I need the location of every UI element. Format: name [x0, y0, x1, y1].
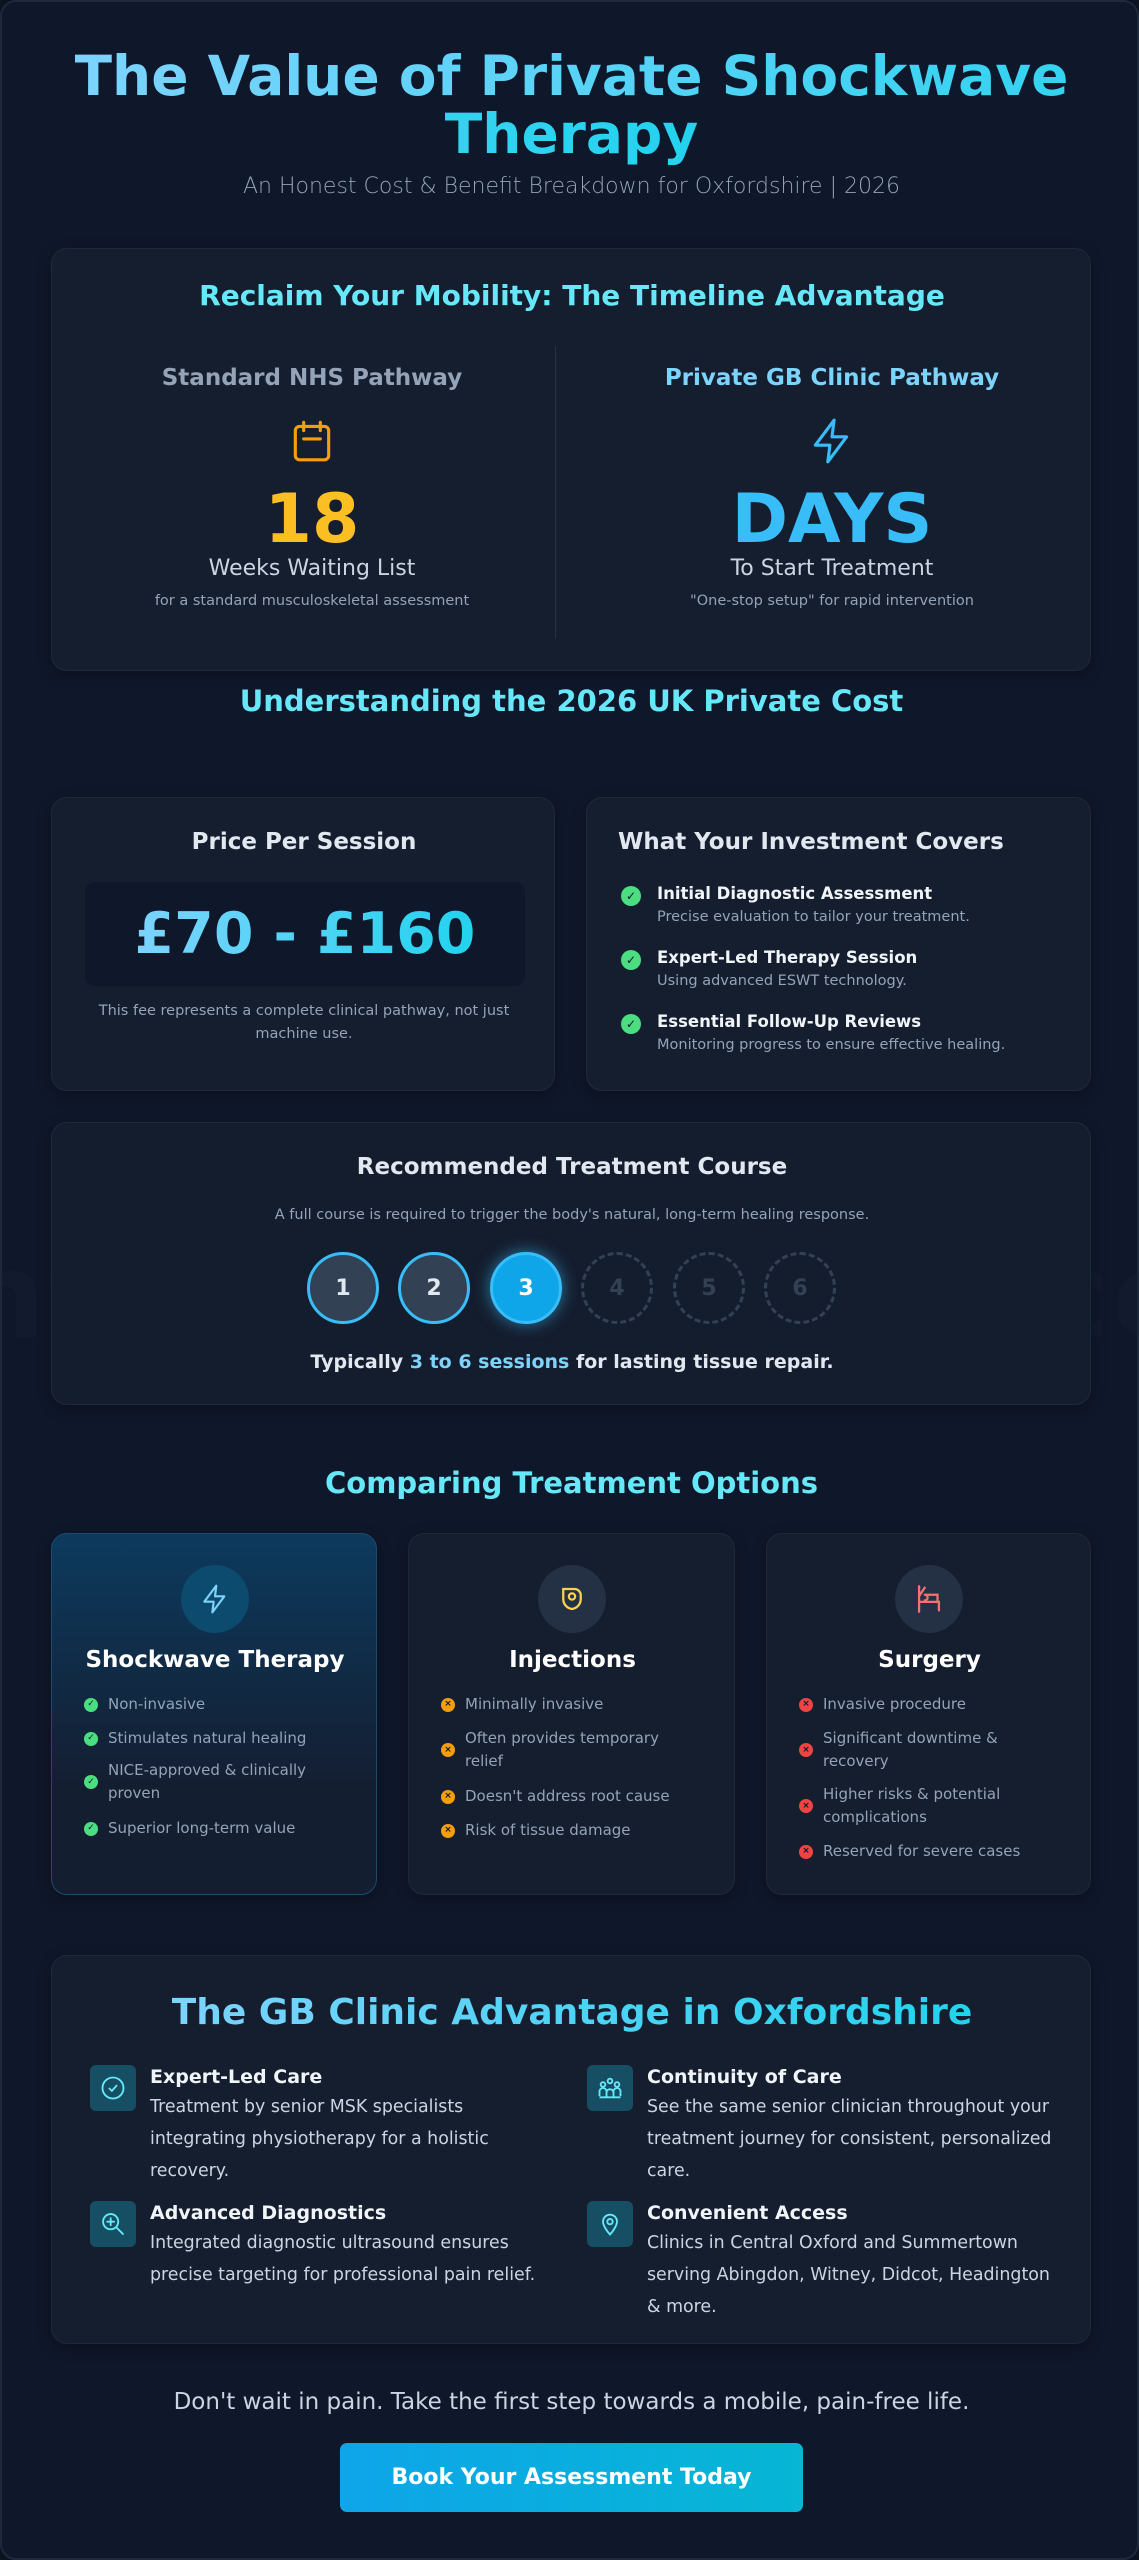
- item: expert-led: Treatment by senior MSK specialists integrating physiotherapy for a holistic recovery.: [150, 2097, 489, 2181]
- title: Therapy: [445, 102, 698, 166]
- item: diagnostics: Integrated diagnostic ultrasound ensures precise targeting for professional pain relief.: [150, 2233, 535, 2285]
- item: expert-led: [90, 2065, 489, 2181]
- panel: GB clinic advantage: The GB Clinic Advantage in Oxfordshire: [172, 1992, 972, 2033]
- card: injections: ×: [444, 1825, 452, 1835]
- card: shockwave: ✓: [87, 1699, 95, 1709]
- item 3: ✓: [626, 1017, 636, 1031]
- panel: treatment course: [51, 1122, 1091, 1405]
- card: surgery: Significant downtime & recovery: [823, 1729, 998, 1770]
- card: surgery: ×: [802, 1846, 810, 1856]
- icon: calendar: [294, 420, 330, 462]
- item: continuity: Continuity of Care: [647, 2066, 842, 2088]
- card: shockwave: Shockwave Therapy: [85, 1647, 345, 1673]
- panel: treatment course: Recommended Treatment Course: [357, 1154, 787, 1180]
- panel: investment covers: [586, 797, 1091, 1091]
- item: continuity: See the same senior clinician throughout your treatment journey for consistent, personalized care.: [647, 2097, 1051, 2181]
- CTA text: Don't wait in pain. Take the first step towards a mobile, pain-free life.: [174, 2389, 969, 2415]
- session circles: 1: [335, 1276, 351, 1300]
- panel: timeline advantage: [51, 248, 1091, 671]
- card: injections: ×: [444, 1699, 452, 1709]
- card: injections: Risk of tissue damage: [465, 1821, 631, 1839]
- card: injections: Injections: [509, 1647, 636, 1673]
- NHS column: for a standard musculoskeletal assessment: [155, 593, 469, 609]
- panel: treatment course: A full course is required to trigger the body's natural, long-term healing response.: [275, 1207, 869, 1223]
- card: shockwave: Non-invasive: [108, 1695, 205, 1713]
- panel: investment covers: What Your Investment Covers: [618, 829, 1004, 855]
- item: diagnostics: Advanced Diagnostics: [150, 2202, 386, 2224]
- card: injections: [408, 1533, 735, 1895]
- item 3: [621, 1012, 1005, 1053]
- card: injections: ×: [444, 1744, 452, 1754]
- session circles: 5: [701, 1276, 717, 1300]
- card: injections: Minimally invasive: [465, 1695, 603, 1713]
- card: surgery: Surgery: [878, 1647, 981, 1673]
- private column: [665, 365, 999, 609]
- item: access: [587, 2201, 1050, 2317]
- panel: GB clinic advantage: [51, 1955, 1091, 2344]
- card: surgery: Reserved for severe cases: [823, 1842, 1020, 1860]
- NHS column: 18: [265, 480, 359, 559]
- NHS column: [155, 365, 469, 609]
- item: expert-led: Expert-Led Care: [150, 2066, 322, 2088]
- session circles: [307, 1242, 836, 1334]
- item 1: Initial Diagnostic Assessment: [657, 884, 932, 903]
- card: surgery: Invasive procedure: [823, 1695, 966, 1713]
- price box: [85, 882, 525, 986]
- private column: "One-stop setup" for rapid intervention: [690, 593, 974, 609]
- CTA button: Book Your Assessment Today: [392, 2465, 751, 2490]
- card: surgery: ×: [802, 1800, 810, 1810]
- card: injections: ×: [444, 1791, 452, 1801]
- item 3: Essential Follow-Up Reviews: [657, 1012, 921, 1031]
- card: shockwave: [51, 1533, 377, 1895]
- session circles: 3: [518, 1276, 534, 1300]
- panel: price per session: Price Per Session: [192, 829, 416, 855]
- item 3: Monitoring progress to ensure effective healing.: [657, 1037, 1005, 1053]
- card: shockwave: Superior long-term value: [108, 1819, 295, 1837]
- session circles: 6: [792, 1276, 808, 1300]
- subtitle: An Honest Cost & Benefit Breakdown for Oxfordshire | 2026: [243, 174, 900, 199]
- session circles: 2: [426, 1276, 442, 1300]
- card: shockwave: Stimulates natural healing: [108, 1729, 306, 1747]
- card: shockwave: NICE-approved & clinically proven: [108, 1761, 306, 1802]
- title: The Value of Private Shockwave: [75, 44, 1068, 108]
- card: surgery: Higher risks & potential complications: [823, 1785, 1000, 1826]
- item 2: [621, 948, 917, 989]
- item 1: [621, 884, 970, 925]
- private column: To Start Treatment: [731, 556, 933, 581]
- private column: DAYS: [732, 480, 932, 559]
- private column: Private GB Clinic Pathway: [665, 365, 999, 391]
- item 2: Using advanced ESWT technology.: [657, 973, 907, 989]
- card: injections: Often provides temporary relief: [465, 1729, 659, 1770]
- card: surgery: [766, 1533, 1091, 1895]
- item 1: ✓: [626, 889, 636, 903]
- CTA button: [340, 2443, 803, 2512]
- heading: comparing: Comparing Treatment Options: [325, 1466, 818, 1500]
- item: continuity: [587, 2065, 1051, 2181]
- heading: private cost: Understanding the 2026 UK Private Cost: [240, 684, 903, 718]
- panel heading: Reclaim Your Mobility: The Timeline Advantage: [199, 279, 945, 312]
- NHS column: Weeks Waiting List: [209, 556, 415, 581]
- panel: price per session: [51, 797, 555, 1091]
- title: [75, 44, 1068, 166]
- item: access: Convenient Access: [647, 2202, 848, 2224]
- card: injections: Doesn't address root cause: [465, 1787, 670, 1805]
- card: shockwave: ✓: [87, 1776, 95, 1786]
- item 2: Expert-Led Therapy Session: [657, 948, 917, 967]
- card: shockwave: ✓: [87, 1823, 95, 1833]
- card: surgery: ×: [802, 1744, 810, 1754]
- item 2: ✓: [626, 953, 636, 967]
- panel: treatment course: Typically 3 to 6 sessions for lasting tissue repair.: [310, 1351, 834, 1373]
- card: surgery: ×: [802, 1699, 810, 1709]
- item: diagnostics: [90, 2201, 535, 2285]
- icon: lightning: [814, 418, 848, 464]
- NHS column: Standard NHS Pathway: [162, 365, 462, 391]
- session circles: 4: [609, 1276, 625, 1300]
- item 1: Precise evaluation to tailor your treatment.: [657, 909, 970, 925]
- item: access: Clinics in Central Oxford and Summertown serving Abingdon, Witney, Didcot, Headington & more.: [647, 2233, 1050, 2317]
- card: shockwave: ✓: [87, 1733, 95, 1743]
- panel: price per session: This fee represents a complete clinical pathway, not just machine use.: [99, 1003, 509, 1042]
- price box: £70 - £160: [134, 901, 475, 967]
